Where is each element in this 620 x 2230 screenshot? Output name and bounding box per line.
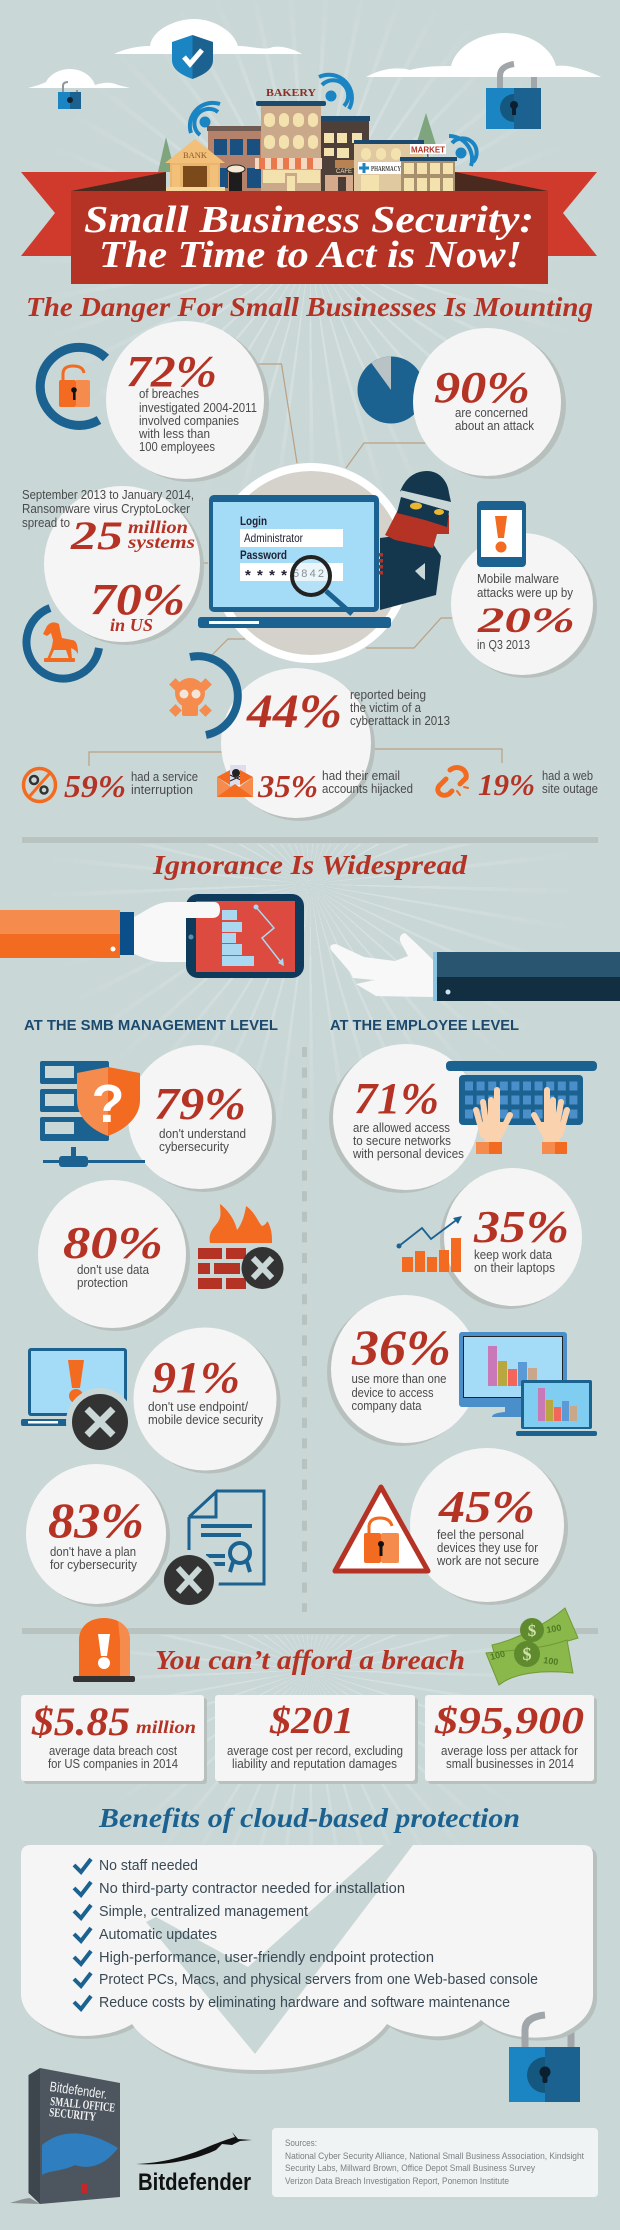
stat: 35 percent laptops [396, 1168, 582, 1309]
stat: 25 million / 70 percent: 70% [90, 575, 185, 624]
caption: investigated 2004-2011 [139, 400, 257, 415]
pharmacy building [354, 140, 424, 191]
icon: large padlock [509, 2015, 580, 2102]
stat: 25 million / 70 percent: systems [127, 532, 195, 552]
stat: 59 percent: interruption [131, 782, 193, 797]
stat: 35 percent laptops: keep work data [474, 1247, 553, 1262]
cost card: per attack: average loss per attack for [441, 1743, 579, 1758]
check list: Protect PCs, Macs, and physical servers from one Web-based console [99, 1971, 538, 1988]
title text: The Time to Act is Now! [99, 234, 522, 276]
laptop [198, 495, 391, 628]
stat: 44 percent [169, 656, 450, 821]
icon: money: 100 [546, 1623, 562, 1635]
stat: 25 million / 70 percent [22, 486, 204, 645]
tablet [186, 894, 304, 978]
icon: server with shield: ? [92, 1074, 124, 1134]
stat: 59 percent: 59% [64, 768, 126, 804]
stat: 45 percent [335, 1448, 568, 1605]
icon: bar chart with trend [396, 1216, 462, 1272]
stat: 83 percent: for cybersecurity [50, 1557, 137, 1572]
salon building [207, 126, 261, 191]
title ribbon [21, 172, 597, 284]
caption: Mobile malware [477, 571, 559, 586]
stat: 25 million / 70 percent: million [128, 517, 188, 537]
check list: Automatic updates [99, 1926, 217, 1943]
heading: danger: The Danger For Small Businesses Is Mounting [26, 292, 593, 322]
stat: 79 percent: cybersecurity [159, 1139, 229, 1154]
cost card: per record: liability and reputation damages [232, 1756, 397, 1771]
cafe building: CAFE [336, 169, 352, 175]
stat: 59 percent: had a service [131, 769, 198, 784]
stat: 91 percent: 91% [152, 1353, 240, 1402]
stat: 80 percent: don't use data [77, 1262, 150, 1277]
bank building: BANK [183, 151, 207, 160]
heading: breach: You can’t afford a breach [155, 1645, 465, 1675]
pharmacy building: PHARMACY [371, 165, 401, 173]
check list: No staff needed [99, 1857, 198, 1874]
caption: the victim of a [350, 700, 422, 715]
small cloud with lock [28, 69, 130, 109]
stat: 80 percent [38, 1180, 284, 1331]
caption: are concerned [455, 405, 528, 420]
stat: 19 percent: 19% [478, 767, 535, 802]
stat: 45 percent: work are not secure [436, 1553, 539, 1568]
stat: 45 percent: 45% [438, 1481, 535, 1532]
heading: benefits: Benefits of cloud-based protection [98, 1803, 520, 1833]
stat: 71 percent: to secure networks [353, 1133, 451, 1148]
stat: 25 million / 70 percent: in US [110, 615, 153, 635]
connector lines [89, 364, 502, 767]
stat: 83 percent: 83% [48, 1492, 144, 1548]
cost card: per attack: $95,900 [434, 1700, 584, 1742]
icon: money: $ [528, 1621, 537, 1640]
stat: 36 percent: use more than one [352, 1371, 446, 1386]
stat: 79 percent [40, 1045, 276, 1192]
stat: 35 percent email: accounts hijacked [322, 781, 413, 796]
icon: open lock with ring [40, 347, 106, 425]
cost card: data breach: average data breach cost [49, 1743, 177, 1758]
icon: broken link [438, 768, 468, 795]
login form: Password [240, 548, 287, 562]
caption: spread to [22, 515, 70, 530]
sleeve [0, 910, 134, 958]
caption: September 2013 to January 2014, [22, 487, 194, 502]
sources: Verizon Data Breach Investigation Report, Ponemon Institute [285, 2176, 509, 2187]
stat: 90 percent: 90% [434, 363, 530, 412]
cost card: data breach: for US companies in 2014 [48, 1756, 178, 1771]
bakery building: BAKERY [266, 87, 316, 99]
backdrop circle [211, 463, 411, 663]
stat: 80 percent: protection [77, 1275, 128, 1290]
stat: 36 percent [327, 1295, 597, 1446]
illustration: open hand [330, 933, 620, 1001]
icon: phone alert [477, 501, 526, 567]
product box: SMALL OFFICE [50, 2094, 116, 2115]
stat: 91 percent: don't use endpoint/ [148, 1399, 248, 1414]
stat: 45 percent: devices they use for [437, 1540, 539, 1555]
thief [364, 471, 451, 610]
sources [272, 2128, 598, 2197]
title text: Small Business Security: [84, 199, 534, 241]
hand [134, 902, 220, 962]
stat: 72 percent: 72% [126, 347, 217, 396]
caption: with less than [138, 426, 210, 441]
stat: 72 percent [40, 321, 269, 482]
caption: in Q3 2013 [477, 637, 530, 652]
product box: SECURITY [49, 2105, 97, 2124]
product box: Bitdefender. [49, 2078, 108, 2102]
caption: cyberattack in 2013 [350, 713, 450, 728]
stat: 19 percent: had a web [542, 768, 593, 783]
stat: 83 percent: don't have a plan [50, 1544, 136, 1559]
pie chart [358, 356, 424, 424]
header illustration [28, 19, 601, 191]
illustration: hand on tablet [0, 894, 304, 978]
check list [74, 1857, 538, 2011]
cost card: per record: $201 [269, 1700, 354, 1742]
bank building [165, 139, 225, 191]
login form: **** [245, 567, 287, 584]
stat: 91 percent: mobile device security [148, 1412, 263, 1427]
icon: money: $ [522, 1644, 532, 1664]
large background check mark [146, 1845, 413, 2054]
padlock shackle behind cloud [568, 2028, 574, 2050]
ribbon folds [71, 172, 548, 191]
stat: 35 percent email: 35% [257, 768, 318, 804]
sources: National Cyber Security Alliance, National Small Business Association, Kindsight [285, 2151, 584, 2162]
market building: MARKET [411, 146, 445, 154]
cost card: per attack [425, 1695, 597, 1784]
central login illustration [198, 463, 451, 663]
login form [240, 514, 343, 584]
stat: 44 percent: 44% [246, 685, 342, 738]
stat: 80 percent: 80% [63, 1217, 163, 1268]
icon: document with certificate [159, 1491, 264, 1610]
stat: 71 percent: are allowed access [353, 1120, 450, 1135]
icon: firewall [198, 1204, 284, 1289]
icon: siren [73, 1618, 135, 1682]
ribbon tails [21, 172, 597, 256]
sources: Sources: [285, 2138, 317, 2149]
caption: reported being [350, 687, 426, 702]
icon: warning triangle with lock [335, 1487, 428, 1571]
icon: laptop with alert [21, 1348, 134, 1456]
cloud panel: benefits [21, 1845, 597, 2074]
magnifying glass [292, 557, 352, 614]
Bitdefender logo: Bitdefender [138, 2169, 251, 2196]
cost card: per attack: small businesses in 2014 [446, 1756, 574, 1771]
caption: of breaches [139, 386, 199, 401]
stat: 45 percent: feel the personal [437, 1527, 524, 1542]
stat: 59 percent [24, 768, 198, 804]
stat: 20 percent: 20% [477, 600, 575, 640]
check list: Reduce costs by eliminating hardware and software maintenance [99, 1994, 510, 2011]
column heading: employee: AT THE EMPLOYEE LEVEL [330, 1017, 519, 1034]
cost card: data breach: million [136, 1717, 196, 1737]
cafe building [320, 116, 370, 191]
stat: 79 percent: 79% [154, 1078, 246, 1129]
stat: trojan ring [26, 608, 99, 679]
stat: 35 percent email: had their email [322, 768, 400, 783]
icon: trojan horse [43, 622, 78, 662]
stat: 35 percent laptops: on their laptops [474, 1260, 555, 1275]
icon: monitor and laptop charts [459, 1332, 597, 1436]
caption: attacks were up by [477, 585, 573, 600]
cost card: data breach [21, 1695, 207, 1784]
stat: 35 percent laptops: 35% [473, 1201, 569, 1252]
icon: money: 100 [543, 1655, 559, 1667]
stat: 71 percent: 71% [354, 1074, 439, 1123]
caption: about an attack [455, 418, 534, 433]
icon: server with shield [40, 1061, 145, 1167]
icon: typing on keyboard [446, 1061, 597, 1154]
cloud with shield [114, 19, 302, 79]
login form: Administrator [244, 531, 303, 545]
stat: 20 percent [451, 501, 597, 678]
column heading: management: AT THE SMB MANAGEMENT LEVEL [24, 1017, 278, 1034]
sources: Security Labs, Millward Brown, Office Depot Small Business Survey [285, 2163, 535, 2174]
cost card: per record: average cost per record, excluding [227, 1743, 403, 1758]
icon: money: 100 [489, 1649, 506, 1662]
bakery building [255, 87, 326, 191]
stat: 36 percent: 36% [351, 1319, 451, 1375]
icon: skull with ring [169, 656, 238, 735]
trees [158, 113, 436, 172]
cost card: data breach: $5.85 [31, 1699, 130, 1744]
stat: 19 percent [438, 767, 598, 802]
stat: 91 percent [21, 1328, 280, 1474]
box artwork [42, 2133, 118, 2175]
stat: 90 percent [358, 328, 566, 479]
stat: 83 percent [26, 1464, 264, 1610]
check list: Simple, centralized management [99, 1903, 309, 1920]
stat: 71 percent [329, 1044, 597, 1193]
product box [10, 2068, 120, 2204]
login form: 5842 [293, 568, 324, 580]
caption: involved companies [139, 413, 239, 428]
cloud with large lock [366, 33, 601, 129]
stat: 25 million / 70 percent: 25 [70, 513, 123, 558]
caption: 100 employees [139, 439, 215, 454]
icon: no gears [24, 768, 56, 802]
stat: 36 percent: company data [352, 1398, 422, 1413]
cost card: per record [215, 1695, 418, 1784]
market building [400, 144, 457, 191]
caption: Ransomware virus CryptoLocker [22, 501, 191, 516]
check list: No third-party contractor needed for installation [99, 1880, 405, 1897]
check list: High-performance, user-friendly endpoint protection [99, 1949, 434, 1966]
stat: 36 percent: device to access [352, 1385, 434, 1400]
login form: Login [240, 514, 267, 528]
stat: 35 percent email [217, 765, 413, 804]
stat: 19 percent: site outage [542, 781, 598, 796]
stat: 71 percent: with personal devices [352, 1146, 464, 1161]
icon: hijacked envelope [217, 765, 253, 797]
icon: money [486, 1608, 578, 1685]
Bitdefender logo [136, 2132, 252, 2196]
stat: 79 percent: don't understand [159, 1126, 246, 1141]
heading: ignorance: Ignorance Is Widespread [152, 850, 468, 880]
wifi signals [190, 75, 477, 166]
